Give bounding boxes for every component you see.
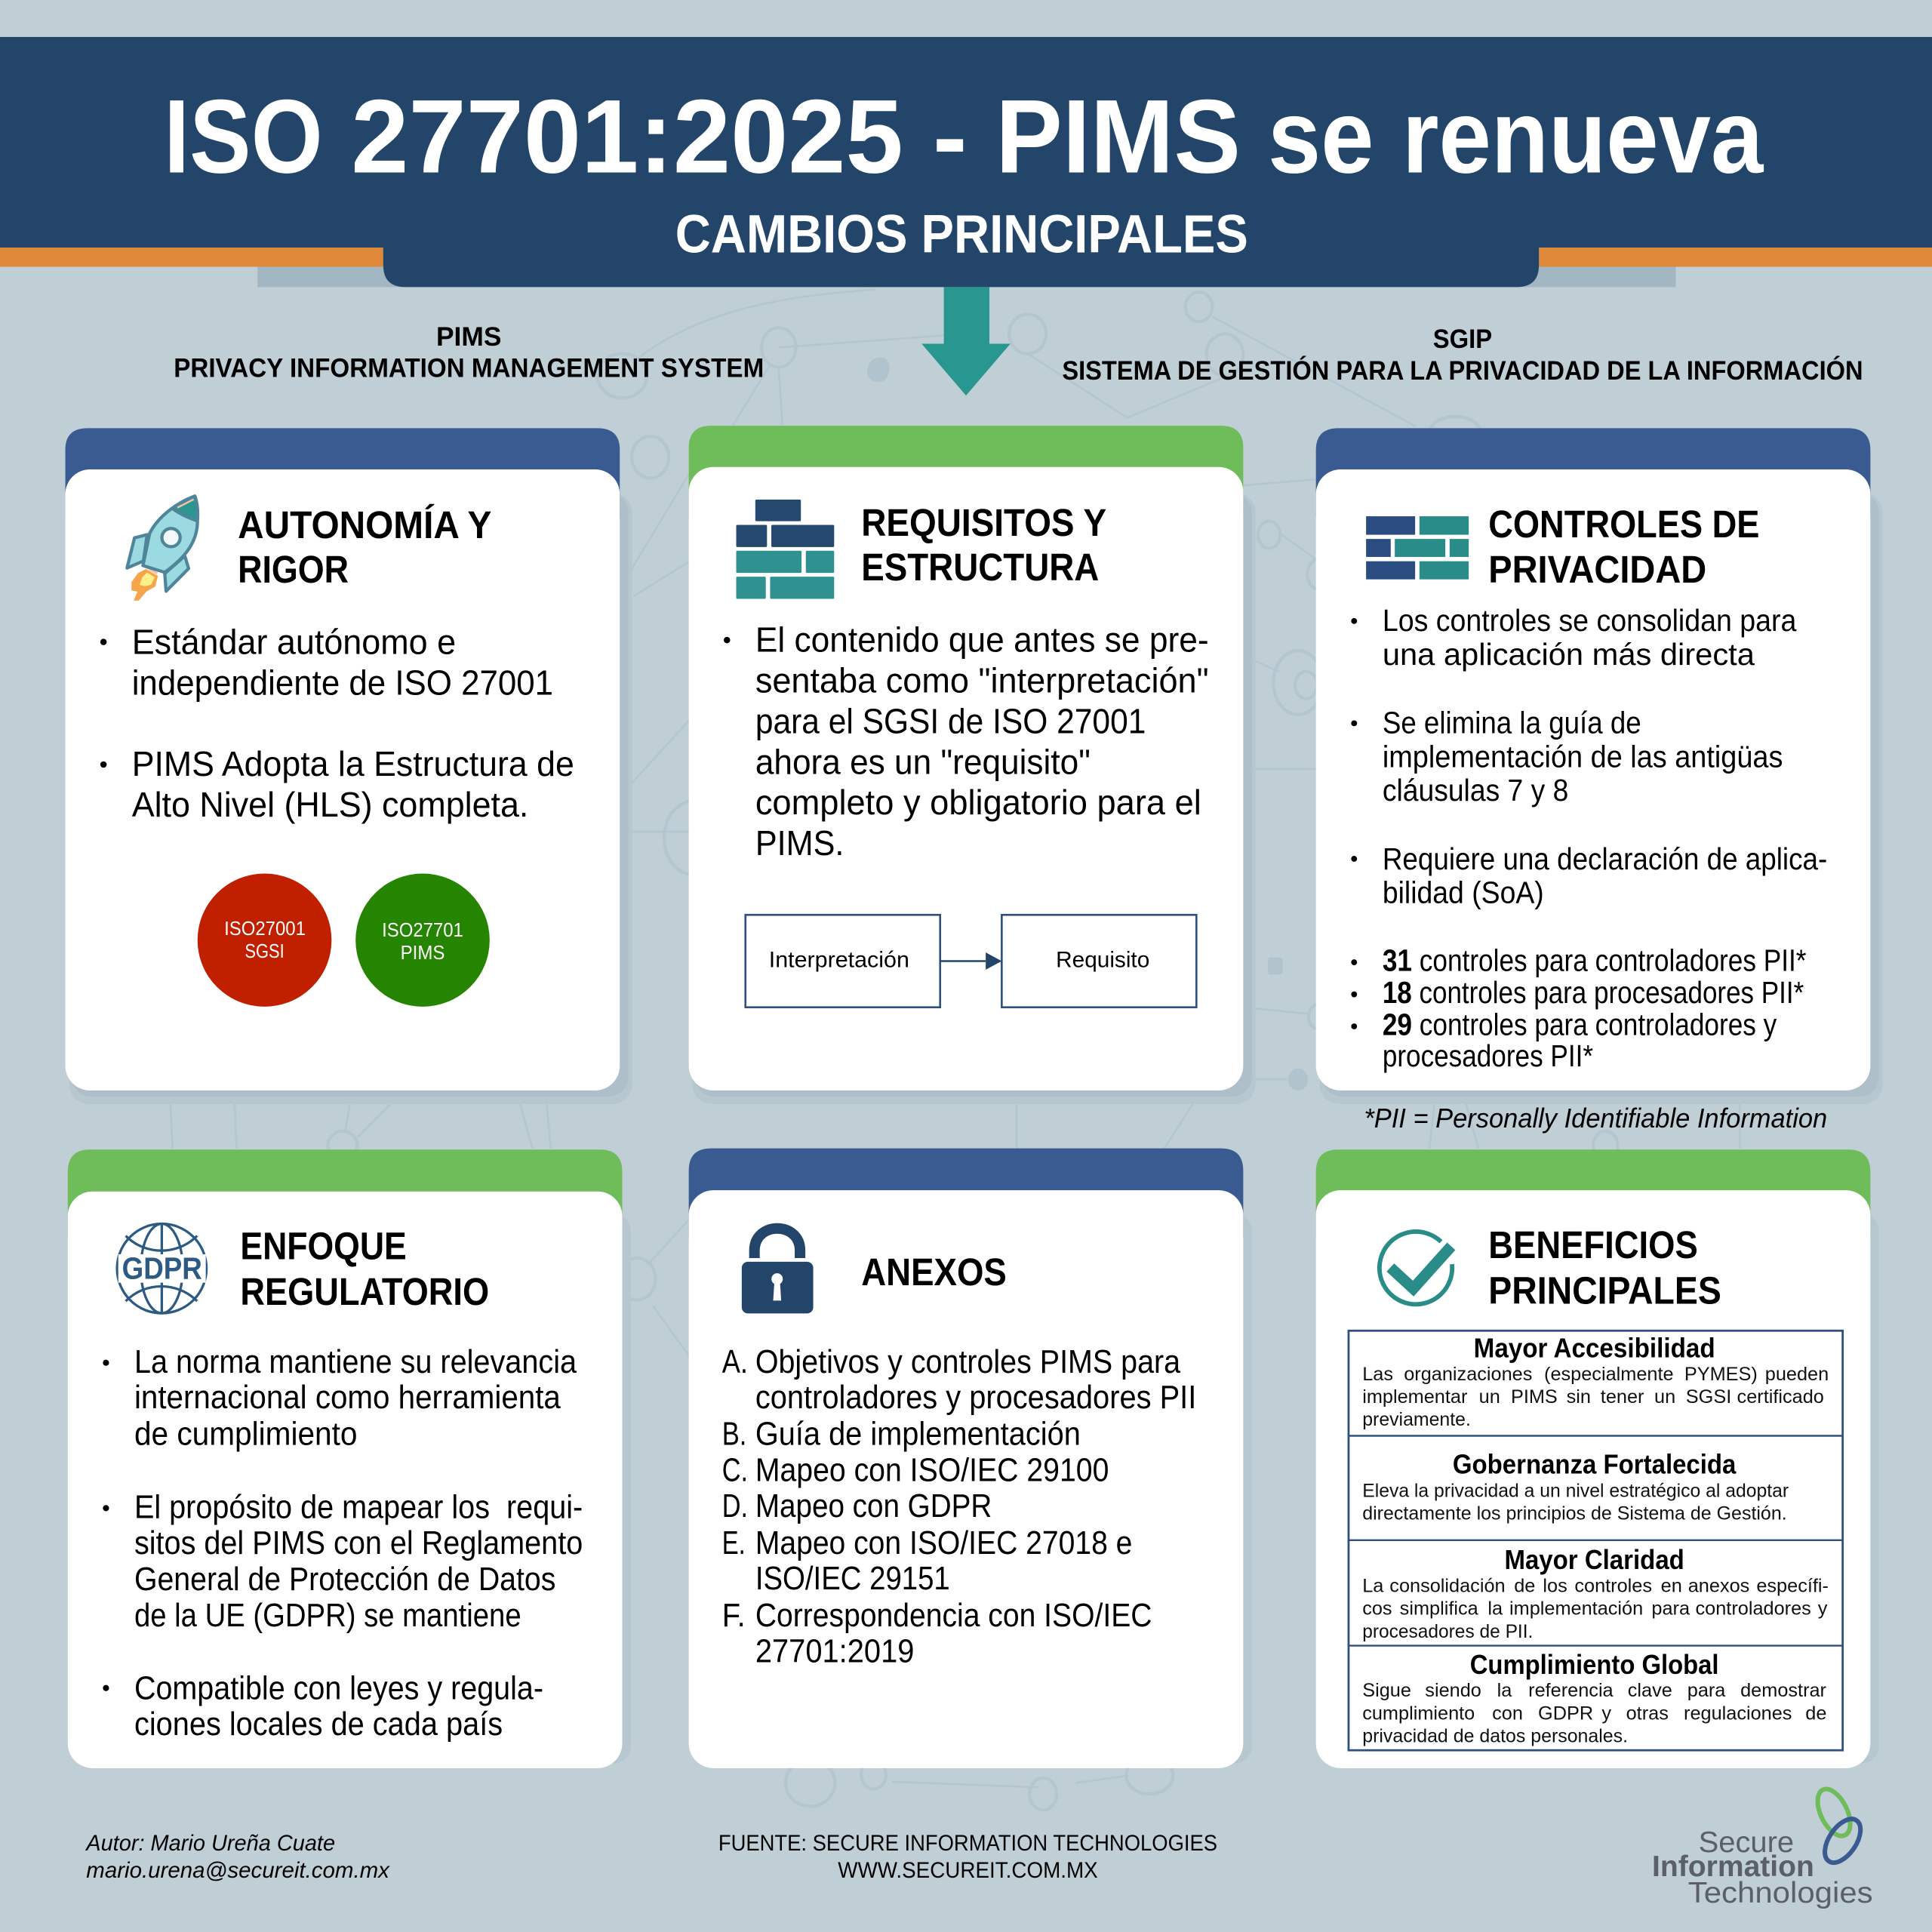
heading (861, 500, 1106, 589)
heading: ANEXOS (861, 1250, 1007, 1294)
heading: ESTRUCTURA (861, 545, 1099, 589)
icon: check circle (1380, 1232, 1452, 1304)
row: mayor claridad: en (1661, 1575, 1682, 1596)
row: cumplimiento global: Sigue (1362, 1680, 1411, 1701)
bullet list (103, 1344, 583, 1743)
title: se (1268, 78, 1374, 195)
bullet list: Requiere una declaración de aplica- (1383, 841, 1827, 876)
annex list (722, 1344, 1196, 1669)
logo: Secure Information Technologies: Secure (1699, 1826, 1794, 1859)
row: mayor accesibilidad: Las (1362, 1364, 1393, 1385)
circle: ISO27701 PIMS: PIMS (401, 941, 445, 964)
heading (1488, 1223, 1721, 1312)
box: Interpretación (746, 915, 940, 1008)
row: mayor claridad: de (1514, 1575, 1535, 1596)
row: mayor accesibilidad: un (1479, 1386, 1500, 1407)
SGIP definition: SISTEMA DE GESTIÓN PARA LA PRIVACIDAD DE LA INFORMACIÓN (1062, 355, 1863, 386)
icon: GDPR globe (117, 1223, 207, 1313)
heading: AUTONOMÍA Y (238, 503, 491, 546)
circle: ISO27001 SGSI: ISO27001 (224, 917, 306, 940)
row: cumplimiento global: la (1497, 1680, 1512, 1701)
author credit (85, 1831, 390, 1883)
box: Requisito: Requisito (1056, 948, 1149, 973)
heading: REQUISITOS Y (861, 500, 1106, 544)
annex list: B. (722, 1416, 746, 1452)
heading (1488, 502, 1759, 591)
bullet list (100, 622, 574, 824)
row: cumplimiento global (1362, 1649, 1826, 1747)
row: mayor accesibilidad (1362, 1332, 1829, 1430)
bullet list: Los controles se consolidan para (1383, 603, 1797, 638)
row: mayor accesibilidad: pueden (1765, 1364, 1829, 1385)
panel: anexos (689, 1149, 1252, 1768)
row: mayor claridad: implementación (1509, 1598, 1643, 1620)
bullet list: Compatible con leyes y regula- (134, 1670, 543, 1706)
bullet list: General de Protección de Datos (134, 1561, 555, 1598)
row: mayor claridad: cos (1362, 1598, 1392, 1620)
PIMS definition (174, 322, 764, 383)
panel: autonomía y rigor (66, 428, 632, 1104)
annex list: Guía de implementación (755, 1416, 1081, 1452)
source credit: WWW.SECUREIT.COM.MX (838, 1858, 1098, 1883)
annex list: 27701:2019 (755, 1633, 914, 1669)
bullet list: 18 controles para procesadores PII* (1383, 975, 1804, 1010)
logo: Secure Information Technologies: Technologies (1688, 1877, 1873, 1909)
heading: PRIVACIDAD (1488, 547, 1706, 591)
row: mayor accesibilidad: certificado (1737, 1386, 1824, 1407)
row: mayor claridad: controles (1574, 1575, 1652, 1596)
annex list: Mapeo con GDPR (755, 1488, 992, 1524)
icon: bricks (1366, 516, 1469, 580)
title: PIMS (995, 78, 1241, 195)
annex list: Objetivos y controles PIMS para (755, 1344, 1180, 1380)
row: mayor accesibilidad: PYMES) (1684, 1364, 1758, 1385)
heading (238, 503, 491, 591)
row: mayor claridad: consolidación (1389, 1575, 1506, 1596)
row: cumplimiento global: GDPR (1538, 1703, 1593, 1724)
logo: Secure Information Technologies (1652, 1784, 1873, 1909)
bullet text: El contenido que antes se pre- (755, 620, 1209, 660)
annex list: A. (722, 1344, 748, 1380)
bullet list: independiente de ISO 27001 (132, 663, 553, 702)
circle: ISO27701 PIMS: ISO27701 (382, 918, 463, 941)
row: cumplimiento global: siendo (1425, 1680, 1481, 1701)
row: gobernanza fortalecida: Gobernanza Fortalecida (1453, 1449, 1737, 1480)
title: renueva (1402, 78, 1764, 195)
author credit: mario.urena@secureit.com.mx (86, 1858, 390, 1883)
icon: brick wall (737, 500, 834, 598)
bullet text: para el SGSI de ISO 27001 (755, 701, 1146, 740)
bullet text: completo y obligatorio para el (755, 783, 1201, 822)
bullet list: procesadores PII* (1383, 1038, 1593, 1073)
row: mayor accesibilidad: Mayor Accesibilidad (1474, 1332, 1715, 1363)
circle: ISO27001 SGSI (198, 874, 331, 1007)
SGIP definition (1062, 325, 1863, 386)
footnote: PII: *PII = Personally Identifiable Information (1364, 1103, 1827, 1134)
bullet list: PIMS Adopta la Estructura de (132, 744, 574, 783)
bullet text: PIMS. (755, 823, 844, 863)
icon: padlock (742, 1229, 814, 1313)
icon: GDPR globe: GDPR (122, 1251, 202, 1286)
source credit: FUENTE: SECURE INFORMATION TECHNOLOGIES (718, 1831, 1217, 1856)
row: cumplimiento global: con (1492, 1703, 1523, 1724)
title: 27701:2025 (351, 78, 903, 195)
box: Requisito (1001, 915, 1196, 1008)
annex list: controladores y procesadores PII (755, 1380, 1196, 1416)
subtitle: CAMBIOS PRINCIPALES (675, 205, 1248, 265)
row: gobernanza fortalecida: Eleva la privacidad a un nivel estratégico al adoptar (1362, 1481, 1789, 1502)
orange accent left (0, 248, 383, 266)
PIMS definition: PRIVACY INFORMATION MANAGEMENT SYSTEM (174, 354, 764, 383)
row: mayor accesibilidad: sin (1567, 1386, 1591, 1407)
annex list: ISO/IEC 29151 (755, 1561, 950, 1597)
bullet text: sentaba como "interpretación" (755, 661, 1209, 700)
bullet list: implementación de las antigüas (1383, 739, 1783, 774)
orange accent right (1539, 248, 1932, 266)
bullet list: internacional como herramienta (134, 1380, 561, 1416)
row: mayor accesibilidad: PIMS (1511, 1386, 1558, 1407)
bullet list: 31 controles para controladores PII* (1383, 943, 1807, 978)
header banner (0, 37, 1932, 287)
header tab (383, 234, 1539, 287)
circle: ISO27001 SGSI: SGSI (245, 940, 285, 962)
row: mayor claridad: procesadores de PII. (1362, 1621, 1533, 1642)
row: mayor accesibilidad: tener (1601, 1386, 1644, 1407)
PIMS definition: PIMS (436, 322, 501, 352)
row: cumplimiento global: de (1805, 1703, 1826, 1724)
row: mayor claridad: simplifica (1400, 1598, 1479, 1620)
annex list: Mapeo con ISO/IEC 29100 (755, 1452, 1109, 1488)
heading: BENEFICIOS (1488, 1223, 1698, 1266)
arrow: interpretación to requisito (940, 952, 1001, 970)
bullet list: cláusulas 7 y 8 (1383, 773, 1568, 808)
row: cumplimiento global: demostrar (1740, 1680, 1826, 1701)
logo: Secure Information Technologies: Information (1652, 1850, 1814, 1883)
row: cumplimiento global: regulaciones (1684, 1703, 1792, 1724)
annex list: D. (722, 1488, 748, 1524)
row: mayor claridad: anexos (1688, 1575, 1749, 1596)
bullet list: 29 controles para controladores y (1383, 1007, 1777, 1041)
row: mayor claridad (1362, 1544, 1829, 1642)
title: ISO (164, 78, 323, 195)
row: cumplimiento global: clave (1628, 1680, 1672, 1701)
bullet list: Se elimina la guía de (1383, 705, 1641, 740)
row: cumplimiento global: referencia (1528, 1680, 1614, 1701)
annex list: E. (722, 1525, 746, 1561)
panel: controles de privacidad (1316, 428, 1883, 1104)
row: mayor accesibilidad: previamente. (1362, 1409, 1471, 1430)
annex list: C. (722, 1452, 748, 1488)
row: mayor accesibilidad: un (1654, 1386, 1675, 1407)
row: cumplimiento global: Cumplimiento Global (1470, 1649, 1719, 1680)
row: mayor accesibilidad: SGSI (1686, 1386, 1731, 1407)
panel: beneficios principales (1316, 1149, 1879, 1768)
icon: rocket (127, 496, 198, 600)
bullet list: de la UE (GDPR) se mantiene (134, 1598, 521, 1634)
SGIP definition: SGIP (1433, 325, 1492, 354)
bullet list: sitos del PIMS con el Reglamento (134, 1525, 583, 1561)
bullet text (724, 620, 1209, 863)
bullet list: bilidad (SoA) (1383, 875, 1544, 910)
panel: enfoque regulatorio (68, 1149, 631, 1768)
annex list: Correspondencia con ISO/IEC (755, 1598, 1152, 1634)
row: mayor claridad: para (1651, 1598, 1690, 1620)
row: cumplimiento global: otras (1626, 1703, 1669, 1724)
row: mayor claridad: Mayor Claridad (1504, 1544, 1684, 1575)
row: mayor claridad: La (1362, 1575, 1384, 1596)
bullet list: Alto Nivel (HLS) completa. (132, 785, 528, 824)
row: gobernanza fortalecida: directamente los principios de Sistema de Gestión. (1362, 1503, 1787, 1524)
box: Interpretación: Interpretación (769, 948, 909, 973)
row: mayor claridad: controladores (1696, 1598, 1811, 1620)
row: gobernanza fortalecida (1362, 1449, 1789, 1524)
heading: REGULATORIO (240, 1269, 489, 1313)
author credit: Autor: Mario Ureña Cuate (85, 1831, 335, 1856)
heading (240, 1224, 489, 1313)
row: mayor claridad: los (1543, 1575, 1567, 1596)
bullet list: El propósito de mapear los requi- (134, 1489, 583, 1525)
row: cumplimiento global: cumplimiento (1362, 1703, 1475, 1724)
source credit (718, 1831, 1217, 1883)
bullet list (1351, 603, 1827, 1073)
annex list: Mapeo con ISO/IEC 27018 e (755, 1525, 1132, 1561)
tab shadow (257, 266, 1675, 287)
row: cumplimiento global: privacidad de datos personales. (1362, 1726, 1628, 1747)
bullet list: Estándar autónomo e (132, 622, 456, 661)
arrow: down (921, 287, 1011, 395)
row: mayor accesibilidad: implementar (1362, 1386, 1467, 1407)
heading: ENFOQUE (240, 1224, 407, 1268)
heading: RIGOR (238, 547, 349, 591)
panel: requisitos y estructura (689, 426, 1256, 1104)
bullet list: La norma mantiene su relevancia (134, 1344, 577, 1380)
bullet list: de cumplimiento (134, 1416, 357, 1452)
bullet list: ciones locales de cada país (134, 1706, 503, 1743)
heading: CONTROLES DE (1488, 502, 1759, 546)
bullet list: una aplicación más directa (1383, 637, 1755, 672)
title: - (933, 78, 968, 195)
row: mayor claridad: y (1818, 1598, 1828, 1620)
circle: ISO27701 PIMS (355, 874, 490, 1007)
heading: PRINCIPALES (1488, 1268, 1721, 1312)
row: mayor claridad: específi- (1756, 1575, 1829, 1596)
bullet text: ahora es un "requisito" (755, 742, 1091, 781)
annex list: F. (722, 1598, 746, 1634)
row: mayor claridad: la (1487, 1598, 1503, 1620)
row: mayor accesibilidad: organizaciones (1404, 1364, 1532, 1385)
row: cumplimiento global: y (1601, 1703, 1611, 1724)
row: mayor accesibilidad: (especialmente (1544, 1364, 1674, 1385)
row: cumplimiento global: para (1687, 1680, 1726, 1701)
table: benefits (1349, 1331, 1843, 1750)
